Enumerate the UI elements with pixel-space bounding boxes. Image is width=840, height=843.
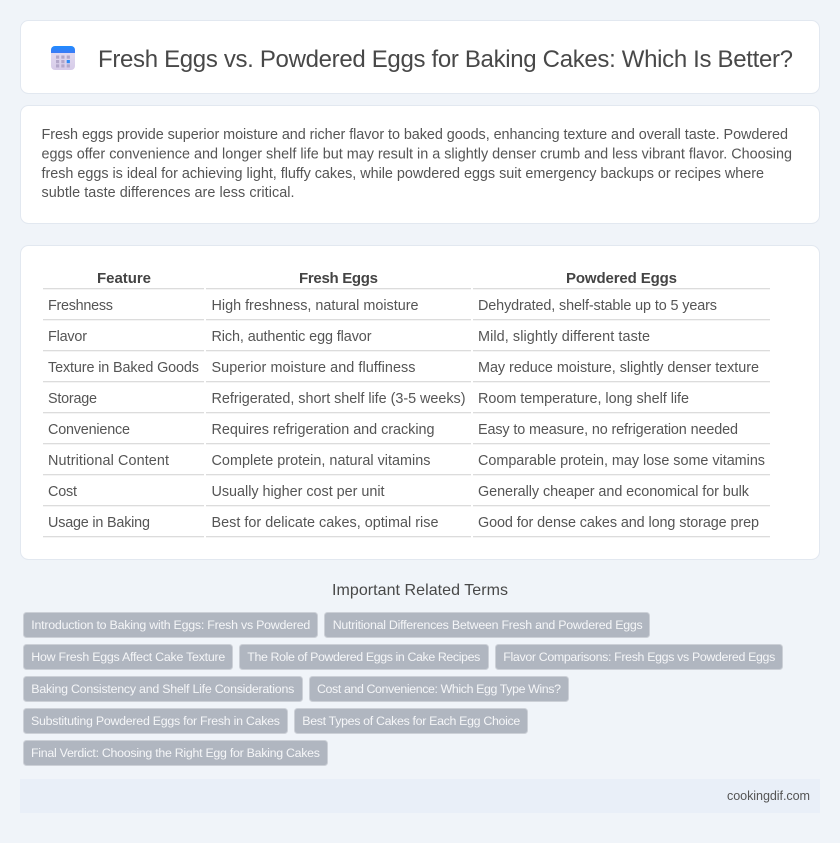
- table row: Convenience: Convenience: [48, 422, 130, 438]
- tag: best types of cakes: Best Types of Cakes for Each Egg Choice: [302, 714, 520, 728]
- table row: Convenience: [43, 422, 770, 444]
- tag: consistency and shelf life: Baking Consistency and Shelf Life Considerations: [31, 682, 294, 696]
- table row: Cost: [43, 484, 770, 506]
- table row: Storage: Room temperature, long shelf life: [478, 391, 689, 407]
- table row: Freshness: [43, 298, 770, 320]
- table row: Nutritional Content: Comparable protein, may lose some vitamins: [478, 453, 765, 469]
- text block: summary paragraph: subtle taste differences are less critical.: [42, 185, 294, 201]
- table row: Texture in Baked Goods: May reduce moisture, slightly denser texture: [478, 360, 759, 376]
- text block: summary paragraph: [42, 127, 792, 201]
- tag: introduction: [24, 612, 318, 638]
- text block: summary paragraph: Fresh eggs provide superior moisture and richer flavor to baked goods, enhancing texture and overall taste. Powdered: [42, 127, 788, 143]
- icon: calendar: [51, 46, 75, 70]
- table row: Storage: Refrigerated, short shelf life (3-5 weeks): [212, 391, 466, 407]
- table row: Flavor: [43, 329, 770, 351]
- tag: role of powdered eggs: The Role of Powdered Eggs in Cake Recipes: [247, 650, 480, 664]
- text block: summary paragraph: eggs offer convenience and longer shelf life but may result in a slightly denser crumb and less vibrant flavor. Choosing: [42, 146, 792, 162]
- table row: Cost: Usually higher cost per unit: [212, 484, 384, 500]
- title: Fresh Eggs vs. Powdered Eggs for Baking Cakes: Which Is Better?: [98, 46, 793, 73]
- tag: introduction: Introduction to Baking with Eggs: Fresh vs Powdered: [31, 618, 310, 632]
- tag: final verdict: Final Verdict: Choosing the Right Egg for Baking Cakes: [31, 746, 320, 760]
- footer: [20, 779, 820, 813]
- tag: substituting: [24, 708, 288, 734]
- table header row: Feature: [97, 270, 151, 287]
- table row: Flavor: Rich, authentic egg flavor: [212, 329, 372, 345]
- footer: cookingdif.com: [727, 789, 810, 803]
- table row: Freshness: Dehydrated, shelf-stable up to 5 years: [478, 298, 717, 314]
- panel: comparison table: [20, 246, 820, 560]
- table row: Nutritional Content: Complete protein, natural vitamins: [212, 453, 430, 469]
- table row: Usage in Baking: Good for dense cakes and long storage prep: [478, 515, 759, 531]
- tag: nutritional differences: Nutritional Differences Between Fresh and Powdered Eggs: [333, 618, 643, 632]
- table row: Convenience: Requires refrigeration and cracking: [212, 422, 434, 438]
- table row: Nutritional Content: Nutritional Content: [48, 453, 169, 469]
- table row: Nutritional Content: [43, 453, 770, 475]
- tag: nutritional differences: [324, 612, 650, 638]
- tag: flavor comparisons: [496, 644, 782, 670]
- tag: cost and convenience: [310, 676, 568, 702]
- tag: best types of cakes: [294, 708, 528, 734]
- table row: Freshness: Freshness: [48, 298, 113, 314]
- tag: cake texture: [24, 644, 232, 670]
- tag: flavor comparisons: Flavor Comparisons: Fresh Eggs vs Powdered Eggs: [503, 650, 775, 664]
- panel: page header: [20, 20, 820, 94]
- tag: consistency and shelf life: [24, 676, 302, 702]
- tag: final verdict: [24, 740, 328, 766]
- table header row: [43, 270, 770, 289]
- table row: Usage in Baking: Best for delicate cakes, optimal rise: [212, 515, 438, 531]
- panel: introduction: [20, 106, 820, 224]
- table row: Usage in Baking: Usage in Baking: [48, 515, 150, 531]
- table row: Flavor: Flavor: [48, 329, 87, 345]
- tag: cake texture: How Fresh Eggs Affect Cake Texture: [31, 650, 225, 664]
- table row: Freshness: High freshness, natural moisture: [212, 298, 418, 314]
- table header row: Powdered Eggs: [566, 270, 677, 287]
- tag: substituting: Substituting Powdered Eggs for Fresh in Cakes: [31, 714, 280, 728]
- table row: Storage: Storage: [48, 391, 97, 407]
- table header row: Fresh Eggs: [299, 270, 378, 287]
- heading: related terms: Important Related Terms: [332, 582, 508, 599]
- table row: Flavor: Mild, slightly different taste: [478, 329, 650, 345]
- table row: Cost: Generally cheaper and economical for bulk: [478, 484, 750, 500]
- table row: Convenience: Easy to measure, no refrigeration needed: [478, 422, 738, 438]
- table row: Texture in Baked Goods: Texture in Baked Goods: [48, 360, 199, 376]
- table row: Cost: Cost: [48, 484, 77, 500]
- panel: related term tags: [24, 612, 782, 766]
- table row: Usage in Baking: [43, 515, 770, 537]
- table row: Texture in Baked Goods: [43, 360, 770, 382]
- text block: summary paragraph: fresh eggs is ideal for achieving light, fluffy cakes, while powdered eggs suit emergency backups or recipes where: [42, 166, 764, 182]
- tag: cost and convenience: Cost and Convenience: Which Egg Type Wins?: [317, 682, 561, 696]
- tag: role of powdered eggs: [240, 644, 488, 670]
- table row: Storage: [43, 391, 770, 413]
- table row: Texture in Baked Goods: Superior moisture and fluffiness: [212, 360, 416, 376]
